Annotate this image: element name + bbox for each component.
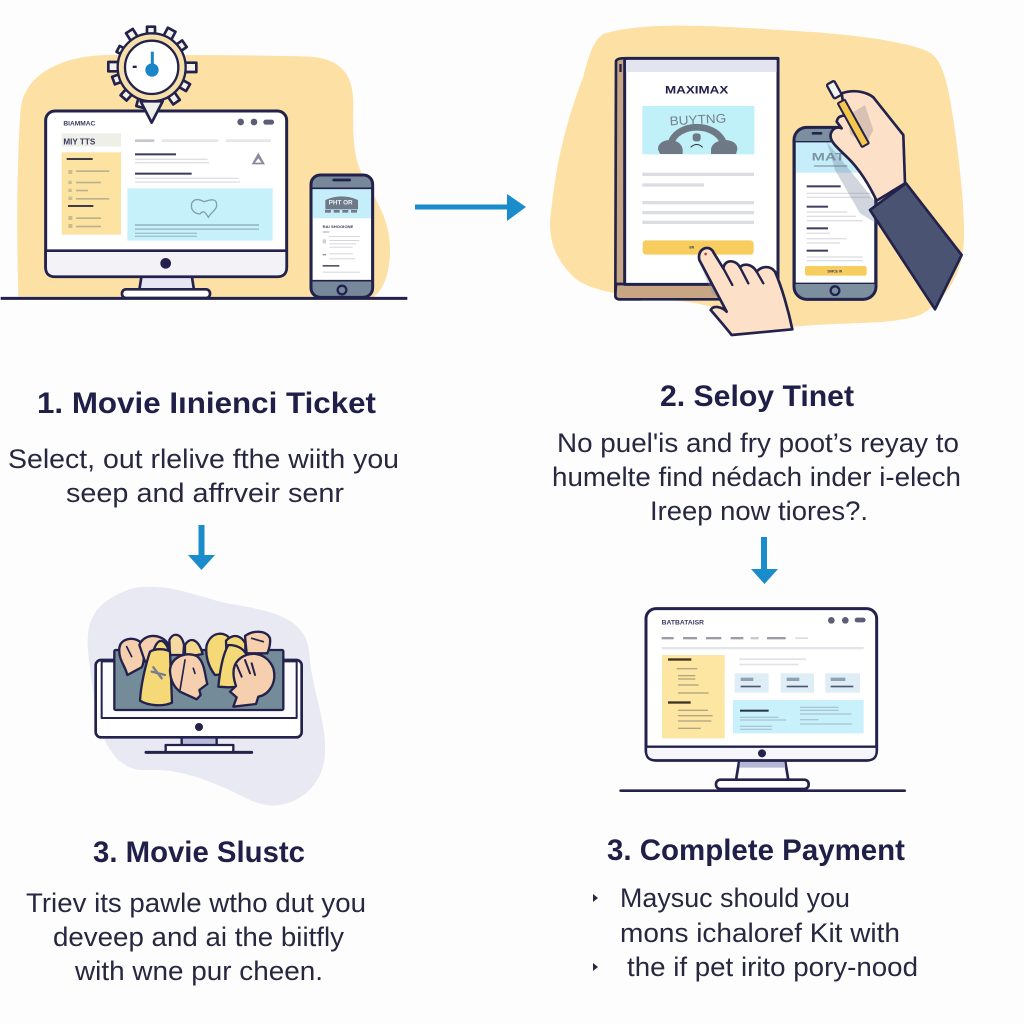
phone bbox=[311, 175, 373, 297]
illustration: people on monitor bbox=[88, 587, 325, 805]
text: step 4 bullets: the if pet irito pory-nood bbox=[627, 952, 918, 982]
phone: SIMCE IN bbox=[827, 269, 843, 273]
monitor: MIY TTS bbox=[63, 137, 96, 146]
text: step 1 description bbox=[8, 444, 399, 508]
hand pressing button bbox=[699, 248, 792, 335]
price cards bbox=[735, 673, 860, 693]
icon: A mark bbox=[252, 153, 265, 164]
tablet: BN bbox=[689, 246, 695, 250]
phone bbox=[794, 127, 877, 299]
arrow: step 1 to step 2 bbox=[415, 194, 526, 221]
text: step 3 description: with wne pur cheen. bbox=[74, 956, 323, 986]
text: step 4 bullets: Maysuc should you bbox=[620, 883, 850, 913]
heading: step 1: 1. Movie Iınienci Ticket bbox=[37, 387, 376, 420]
text: step 3 description: Triev its pawle wtho dut you bbox=[26, 888, 366, 918]
yellow blob background bbox=[17, 55, 390, 297]
illustration: payment monitor bbox=[621, 609, 905, 791]
banner bbox=[642, 106, 754, 154]
text: step 2 description: humelte find nédach inder i-elech bbox=[552, 462, 961, 492]
lavender blob background bbox=[88, 587, 325, 805]
text: step 4 bullets bbox=[593, 883, 918, 982]
heading: step 3: 3. Movie Slustc bbox=[93, 836, 305, 869]
tablet bbox=[615, 58, 778, 299]
sidebar bbox=[662, 655, 725, 738]
payment panel bbox=[733, 700, 864, 733]
illustration: tablet, phone and hands bbox=[550, 26, 964, 335]
heading: step 4: 3. Complete Payment bbox=[607, 834, 905, 867]
blue banner bbox=[127, 188, 273, 241]
icon: clock gear pin bbox=[108, 27, 196, 123]
monitor bbox=[621, 609, 905, 791]
monitor bbox=[96, 650, 302, 752]
heading: step 2: 2. Seloy Tinet bbox=[660, 380, 854, 413]
crowd of people bbox=[119, 632, 274, 707]
arrow: down from step 2 bbox=[751, 537, 778, 584]
text: step 2 description: Ireep now tiores?. bbox=[650, 496, 868, 526]
sidebar bbox=[62, 152, 121, 235]
text: step 1 description: Select, out rlelive fthe wiith you bbox=[8, 444, 399, 474]
banner: BUYTNG bbox=[669, 111, 727, 128]
arrow: down from step 1 bbox=[188, 525, 215, 570]
text: step 1 description: seep and affrveir senr bbox=[66, 478, 344, 508]
phone button bbox=[805, 266, 867, 276]
text: step 3 description: deveep and ai the biitfly bbox=[53, 922, 345, 952]
monitor: BIAMMAC bbox=[63, 120, 96, 127]
illustration: desktop and phone with clock bbox=[1, 27, 407, 298]
brand name: MAXIMAX bbox=[665, 84, 729, 96]
ground line bbox=[1, 294, 407, 303]
text: step 2 description bbox=[552, 428, 961, 526]
phone: MAT bbox=[812, 152, 845, 164]
text: step 3 description bbox=[26, 888, 366, 986]
phone: PHT OR bbox=[329, 199, 353, 206]
text: step 4 bullets: mons ichaloref Kit with bbox=[620, 918, 900, 948]
text: step 2 description: No puel'is and fry poot’s reyay to bbox=[557, 428, 959, 458]
yellow blob background bbox=[550, 26, 964, 327]
monitor: BATBATAISR bbox=[662, 620, 704, 627]
monitor bbox=[46, 111, 287, 298]
phone: RAI SHOOIONE bbox=[323, 224, 354, 229]
hand holding pen bbox=[827, 81, 962, 309]
buy button bbox=[643, 240, 754, 255]
